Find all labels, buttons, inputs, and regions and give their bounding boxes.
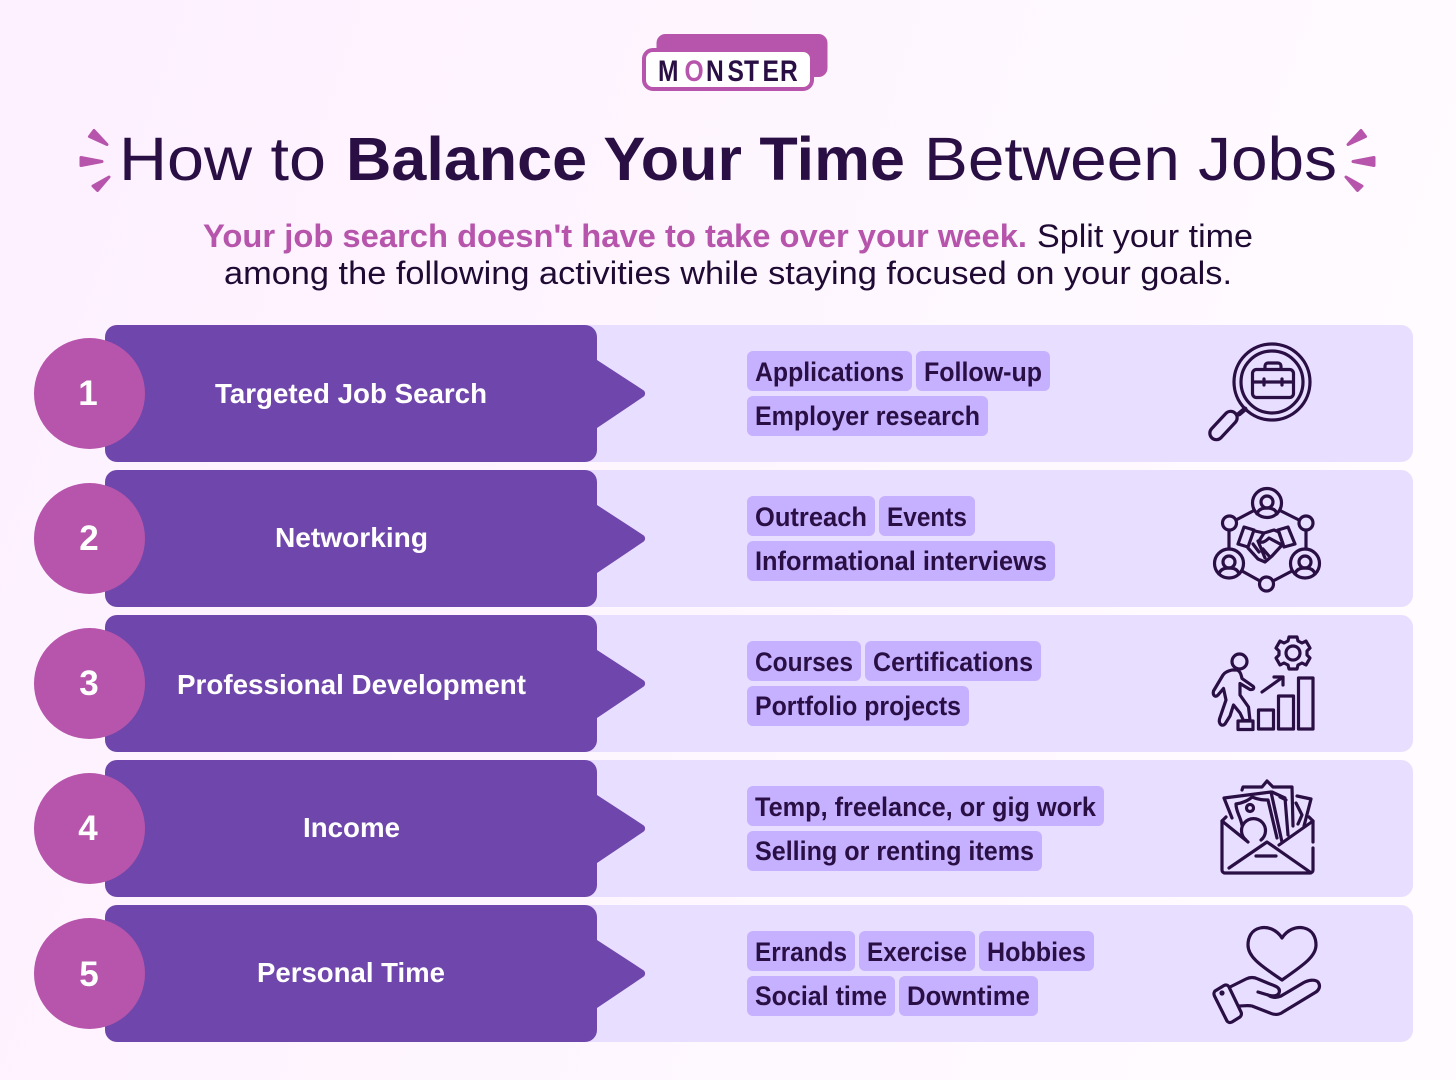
logo: [644, 34, 828, 89]
tag: follow-up: Follow-up: [924, 357, 1042, 387]
number badge 3: [34, 628, 145, 739]
tag: certifications: Certifications: [873, 647, 1033, 677]
panel: row 3 professional development: [34, 615, 1413, 752]
icon: person climbing bars: [1213, 637, 1313, 730]
tag: informational interviews: Informational interviews: [755, 546, 1047, 576]
tag: events: Events: [887, 502, 967, 532]
tag: portfolio projects: Portfolio projects: [755, 691, 961, 721]
banner: professional development: [105, 615, 645, 752]
tag: employer research: Employer research: [755, 401, 980, 431]
tag: outreach: [747, 496, 875, 536]
label: professional development: Professional Development: [177, 669, 526, 700]
subtitle: [203, 218, 1253, 291]
title: [119, 125, 1337, 193]
subtitle: Your job search doesn't have to take over your week.: [203, 218, 1027, 254]
icon: hand holding heart: [1214, 927, 1319, 1023]
tag: hobbies: [979, 931, 1094, 971]
number badge 2: 2: [79, 519, 99, 558]
number badge 1: [34, 338, 145, 449]
tag: downtime: [899, 976, 1038, 1016]
title: Balance Your Time: [346, 125, 905, 193]
tag: selling or renting items: Selling or renting items: [755, 836, 1034, 866]
tag: errands: Errands: [755, 937, 847, 967]
tag: exercise: [859, 931, 975, 971]
tag: exercise: Exercise: [867, 937, 967, 967]
label: targeted job search: Targeted Job Search: [215, 378, 487, 409]
number badge 5: 5: [79, 955, 99, 994]
tag: applications: [747, 351, 912, 391]
tag: outreach: Outreach: [755, 502, 867, 532]
number badge 1: 1: [78, 374, 98, 413]
icon: magnifier with briefcase: [1207, 344, 1310, 442]
banner: income: [105, 760, 645, 897]
number badge 4: 4: [78, 809, 98, 848]
label: income: Income: [303, 812, 400, 843]
panel: row 1 targeted job search: [34, 325, 1413, 462]
subtitle: among the following activities while staying focused on your goals.: [224, 255, 1232, 291]
icon: envelope with cash: [1222, 781, 1313, 873]
icon: network handshake: [1214, 488, 1320, 591]
logo: MONSTER: [658, 54, 798, 88]
tag: errands: [747, 931, 855, 971]
number badge 3: 3: [79, 664, 99, 703]
tag: downtime: Downtime: [907, 981, 1030, 1011]
tag: events: [879, 496, 975, 536]
tag: courses: [747, 641, 861, 681]
tag: social time: Social time: [755, 981, 887, 1011]
panel: row 5 personal time: [34, 905, 1413, 1042]
subtitle: Split your time: [1037, 218, 1253, 254]
tag: hobbies: Hobbies: [987, 937, 1086, 967]
number badge 4: [34, 773, 145, 884]
banner: networking: [105, 470, 645, 607]
tag: follow-up: [916, 351, 1050, 391]
tag: applications: Applications: [755, 357, 904, 387]
number badge 5: [34, 918, 145, 1029]
title: How to: [119, 125, 326, 193]
decorative sparks right: [1346, 130, 1374, 190]
tag: temp, freelance, or gig work: Temp, freelance, or gig work: [755, 792, 1097, 822]
panel: row 4 income: [34, 760, 1413, 897]
decorative sparks left: [81, 130, 109, 190]
banner: personal time: [105, 905, 645, 1042]
number badge 2: [34, 483, 145, 594]
title: Between Jobs: [924, 125, 1337, 193]
banner: targeted job search: [105, 325, 645, 462]
tag: courses: Courses: [755, 647, 853, 677]
panel: row 2 networking: [34, 470, 1413, 607]
label: networking: Networking: [275, 522, 428, 553]
label: personal time: Personal Time: [257, 957, 445, 988]
